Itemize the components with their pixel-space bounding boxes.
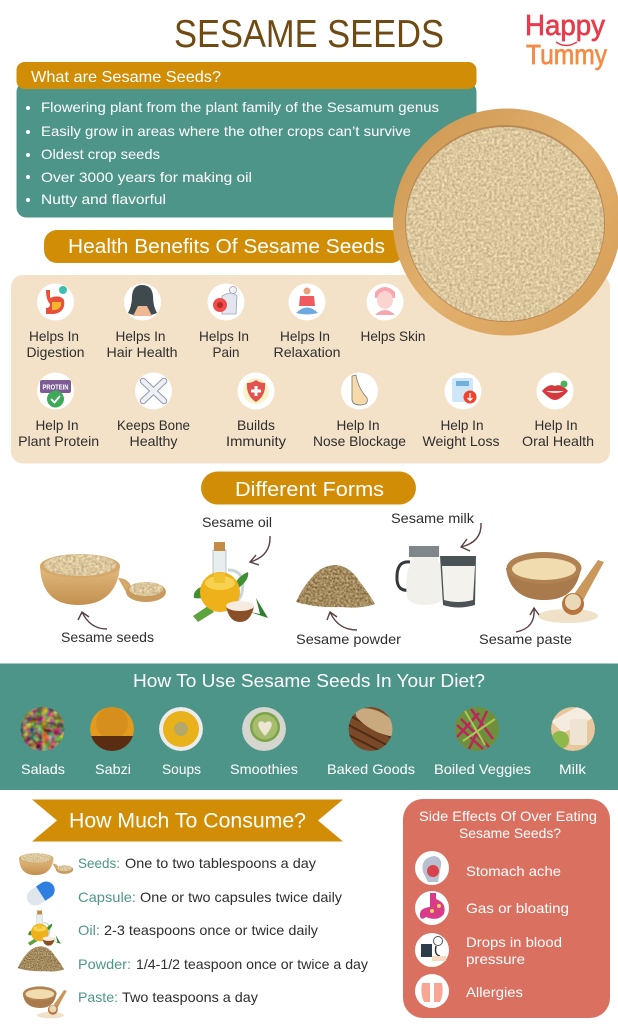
label: Immunity [226, 433, 286, 449]
arrow [461, 523, 481, 551]
panel: what are sesame seeds [16, 62, 476, 218]
food: sabzi [90, 707, 134, 752]
label: Helps In [116, 328, 166, 344]
icon: protein: PROTEIN [42, 384, 68, 392]
label: Hair Health [106, 344, 178, 360]
form: sesame paste [479, 552, 604, 647]
icon: hair [124, 284, 161, 320]
label [274, 328, 340, 360]
bullet list: Nutty and flavorful [41, 191, 166, 207]
food labels [21, 761, 587, 777]
label: Help In [534, 417, 578, 433]
panel: health benefits [11, 275, 610, 464]
label: Help In [440, 417, 484, 433]
food labels: Boiled Veggies [434, 761, 531, 777]
food labels: Smoothies [230, 761, 298, 777]
ribbon heading: how much to consume [32, 800, 343, 842]
label: Help In [336, 417, 380, 433]
label: Builds [237, 417, 275, 433]
icon: pain [208, 284, 244, 320]
label: Helps In [29, 328, 79, 344]
label: pressure [466, 951, 525, 967]
arrow [250, 536, 270, 565]
label: Helps In [199, 328, 249, 344]
icon: blood pressure [415, 933, 449, 967]
label: Helps In [280, 328, 330, 344]
icon: digestion [37, 284, 74, 320]
bullet list: Oldest crop seeds [41, 146, 160, 162]
bullet list: Flowering plant from the plant family of the Sesamum genus [41, 99, 439, 115]
bullet list: Over 3000 years for making oil [41, 169, 252, 185]
label [106, 328, 178, 360]
food labels: Soups [162, 761, 201, 777]
dosage: oil: Oil: [78, 922, 100, 938]
label: Oral Health [522, 433, 594, 449]
heading: Sesame Seeds? [459, 825, 561, 841]
food: baked goods [348, 707, 394, 753]
heading bar [16, 62, 476, 89]
label [226, 417, 286, 449]
panel: side effects [403, 799, 610, 1018]
heading: health benefits: Health Benefits Of Sesame Seeds [68, 236, 385, 258]
label: Pain [212, 344, 240, 360]
form: sesame seeds [40, 554, 166, 645]
dosage: seeds: One to two tablespoons a day [125, 855, 316, 871]
food: milk [551, 707, 595, 751]
icon: oral health [536, 372, 574, 410]
dosage: powder [18, 946, 368, 972]
label [117, 417, 190, 449]
ribbon heading: how much to consume: How Much To Consume? [69, 810, 306, 832]
label [18, 417, 99, 449]
arrow [78, 612, 107, 629]
label: Helps Skin [360, 328, 426, 344]
dosage: paste: Paste: [78, 989, 118, 1005]
food: boiled veggies [455, 707, 499, 751]
icon: stomach ache [415, 851, 449, 885]
dosage: seeds: Seeds: [78, 855, 120, 871]
title: SESAME SEEDS [174, 13, 444, 56]
dosage: seeds [19, 853, 316, 875]
label: Sesame milk [391, 510, 475, 526]
form: sesame milk [391, 510, 481, 608]
food labels: Milk [559, 761, 587, 777]
label: Help In [36, 417, 78, 433]
label: Allergies [466, 984, 523, 1000]
icon: allergies [415, 974, 449, 1008]
icon: immunity [238, 372, 274, 410]
label: Drops in blood [466, 934, 562, 950]
dosage: capsule: One or two capsules twice daily [140, 889, 342, 905]
bullet list [26, 99, 439, 207]
icon: skin [366, 284, 404, 320]
panel: how to use in your diet [0, 664, 618, 790]
food labels: Salads [21, 761, 65, 777]
label: Sesame seeds [61, 629, 154, 645]
heading: Side Effects Of Over Eating [419, 808, 597, 824]
label [422, 417, 500, 449]
label: Relaxation [274, 344, 340, 360]
dosage: powder: Powder: [78, 956, 131, 972]
food: soups [159, 707, 203, 751]
form: sesame powder [296, 565, 401, 647]
label: Gas or bloating [466, 900, 569, 916]
logo: Happy Tummy: Happy [525, 10, 605, 42]
icon: relaxation [288, 284, 326, 320]
label [199, 328, 249, 360]
label: Sesame paste [479, 631, 572, 647]
food labels: Sabzi [95, 761, 131, 777]
label: Digestion [26, 344, 84, 360]
logo: Happy Tummy: Tummy [526, 39, 607, 70]
dosage: paste: Two teaspoons a day [122, 989, 258, 1005]
food labels: Baked Goods [327, 761, 415, 777]
label [522, 417, 594, 449]
label [26, 328, 84, 360]
icon: weight loss [444, 372, 482, 410]
heading bar: What are Sesame Seeds? [31, 69, 221, 86]
heading: different forms [201, 472, 416, 504]
food: smoothies [242, 707, 286, 751]
heading: health benefits [44, 230, 404, 263]
food: salads [20, 707, 64, 751]
label [466, 934, 562, 967]
arrow [327, 612, 357, 630]
label [313, 417, 406, 449]
dosage: capsule: Capsule: [78, 889, 136, 905]
form: sesame oil [193, 514, 272, 622]
logo: Happy Tummy [525, 10, 607, 70]
label: Sesame powder [296, 631, 401, 647]
label: Plant Protein [18, 433, 99, 449]
label: Keeps Bone [117, 417, 190, 433]
icon: protein [37, 372, 74, 410]
label: Stomach ache [466, 863, 561, 879]
bullet list: Easily grow in areas where the other crops can’t survive [41, 123, 411, 139]
label: Weight Loss [422, 433, 500, 449]
image: wooden bowl of sesame seeds [393, 108, 618, 336]
arrow [516, 608, 539, 632]
dosage: powder: 1/4-1/2 teaspoon once or twice a day [136, 956, 368, 972]
icon: gas or bloating [415, 891, 449, 925]
icon: bone [135, 372, 172, 410]
heading [419, 808, 597, 841]
icon: nose [341, 372, 378, 410]
dosage: paste [23, 986, 258, 1018]
label: Nose Blockage [313, 433, 406, 449]
dosage: oil: 2-3 teaspoons once or twice daily [104, 922, 318, 938]
dosage: capsule [24, 878, 342, 909]
label: Healthy [130, 433, 178, 449]
dosage: oil [28, 910, 318, 946]
label: Sesame oil [202, 514, 272, 530]
heading: different forms: Different Forms [235, 479, 384, 501]
heading: How To Use Sesame Seeds In Your Diet? [133, 671, 485, 691]
